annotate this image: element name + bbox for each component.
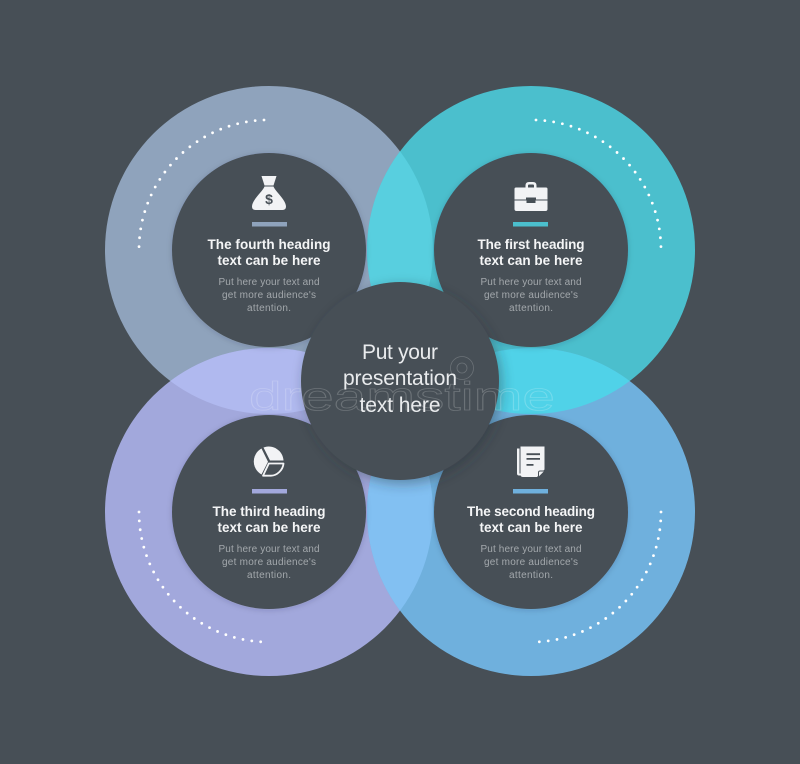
icon: briefcase — [514, 182, 548, 211]
heading: The second heading — [467, 504, 595, 519]
heading: The fourth heading — [208, 237, 330, 252]
body text: attention. — [247, 303, 291, 314]
body text — [480, 544, 582, 581]
panel disc — [434, 415, 628, 609]
body text: attention. — [509, 570, 553, 581]
heading: The third heading — [212, 504, 326, 519]
center text: presentation — [343, 367, 457, 390]
overlap: fourth and third — [170, 348, 306, 414]
panel: second heading — [434, 415, 628, 609]
dotted arc: first — [536, 120, 661, 250]
heading: text can be here — [218, 520, 321, 535]
panel: third heading — [172, 415, 366, 609]
heading — [212, 504, 326, 535]
accent bar — [513, 489, 548, 494]
body text: get more audience's — [484, 290, 578, 301]
body text: get more audience's — [484, 557, 578, 568]
accent bar — [252, 222, 287, 226]
panel disc — [172, 415, 366, 609]
icon: money bag — [252, 176, 286, 210]
ring: first, teal — [367, 86, 695, 414]
heading — [208, 237, 330, 268]
center disc — [301, 282, 499, 480]
body text: Put here your text and — [480, 277, 582, 288]
icon: pie chart — [254, 447, 284, 476]
dotted arc: fourth — [139, 120, 264, 250]
body text: get more audience's — [222, 557, 316, 568]
body text — [218, 544, 320, 581]
body text: Put here your text and — [218, 544, 320, 555]
panel disc — [172, 153, 366, 347]
body text: Put here your text and — [218, 277, 320, 288]
watermark: dreamstime — [249, 375, 555, 419]
accent bar — [252, 489, 287, 494]
icon: documents — [517, 446, 545, 478]
panel: first heading — [434, 153, 628, 347]
overlap: fourth and first — [367, 152, 433, 286]
panel disc — [434, 153, 628, 347]
ring: second, blue — [367, 348, 695, 676]
dotted arc: third — [139, 512, 265, 642]
heading: text can be here — [480, 253, 583, 268]
body text: Put here your text and — [480, 544, 582, 555]
panel: fourth heading — [172, 153, 366, 347]
body text: attention. — [247, 570, 291, 581]
accent bar — [513, 222, 548, 226]
overlap: first and second — [494, 348, 630, 414]
ring: third, lavender — [105, 348, 433, 676]
body text — [218, 277, 320, 314]
watermark — [249, 356, 555, 419]
ring: fourth, slate — [105, 86, 433, 414]
center text: text here — [360, 394, 440, 417]
heading — [467, 504, 595, 535]
heading: text can be here — [480, 520, 583, 535]
center text — [343, 341, 457, 417]
body text: attention. — [509, 303, 553, 314]
center text: Put your — [362, 341, 438, 364]
center panel — [301, 282, 499, 480]
heading: The first heading — [478, 237, 584, 252]
body text — [480, 277, 582, 314]
body text: get more audience's — [222, 290, 316, 301]
dotted arc: second — [535, 512, 661, 642]
overlap: third and second — [367, 476, 433, 610]
icon: money bag: $ — [265, 191, 273, 207]
heading: text can be here — [218, 253, 321, 268]
heading — [478, 237, 584, 268]
